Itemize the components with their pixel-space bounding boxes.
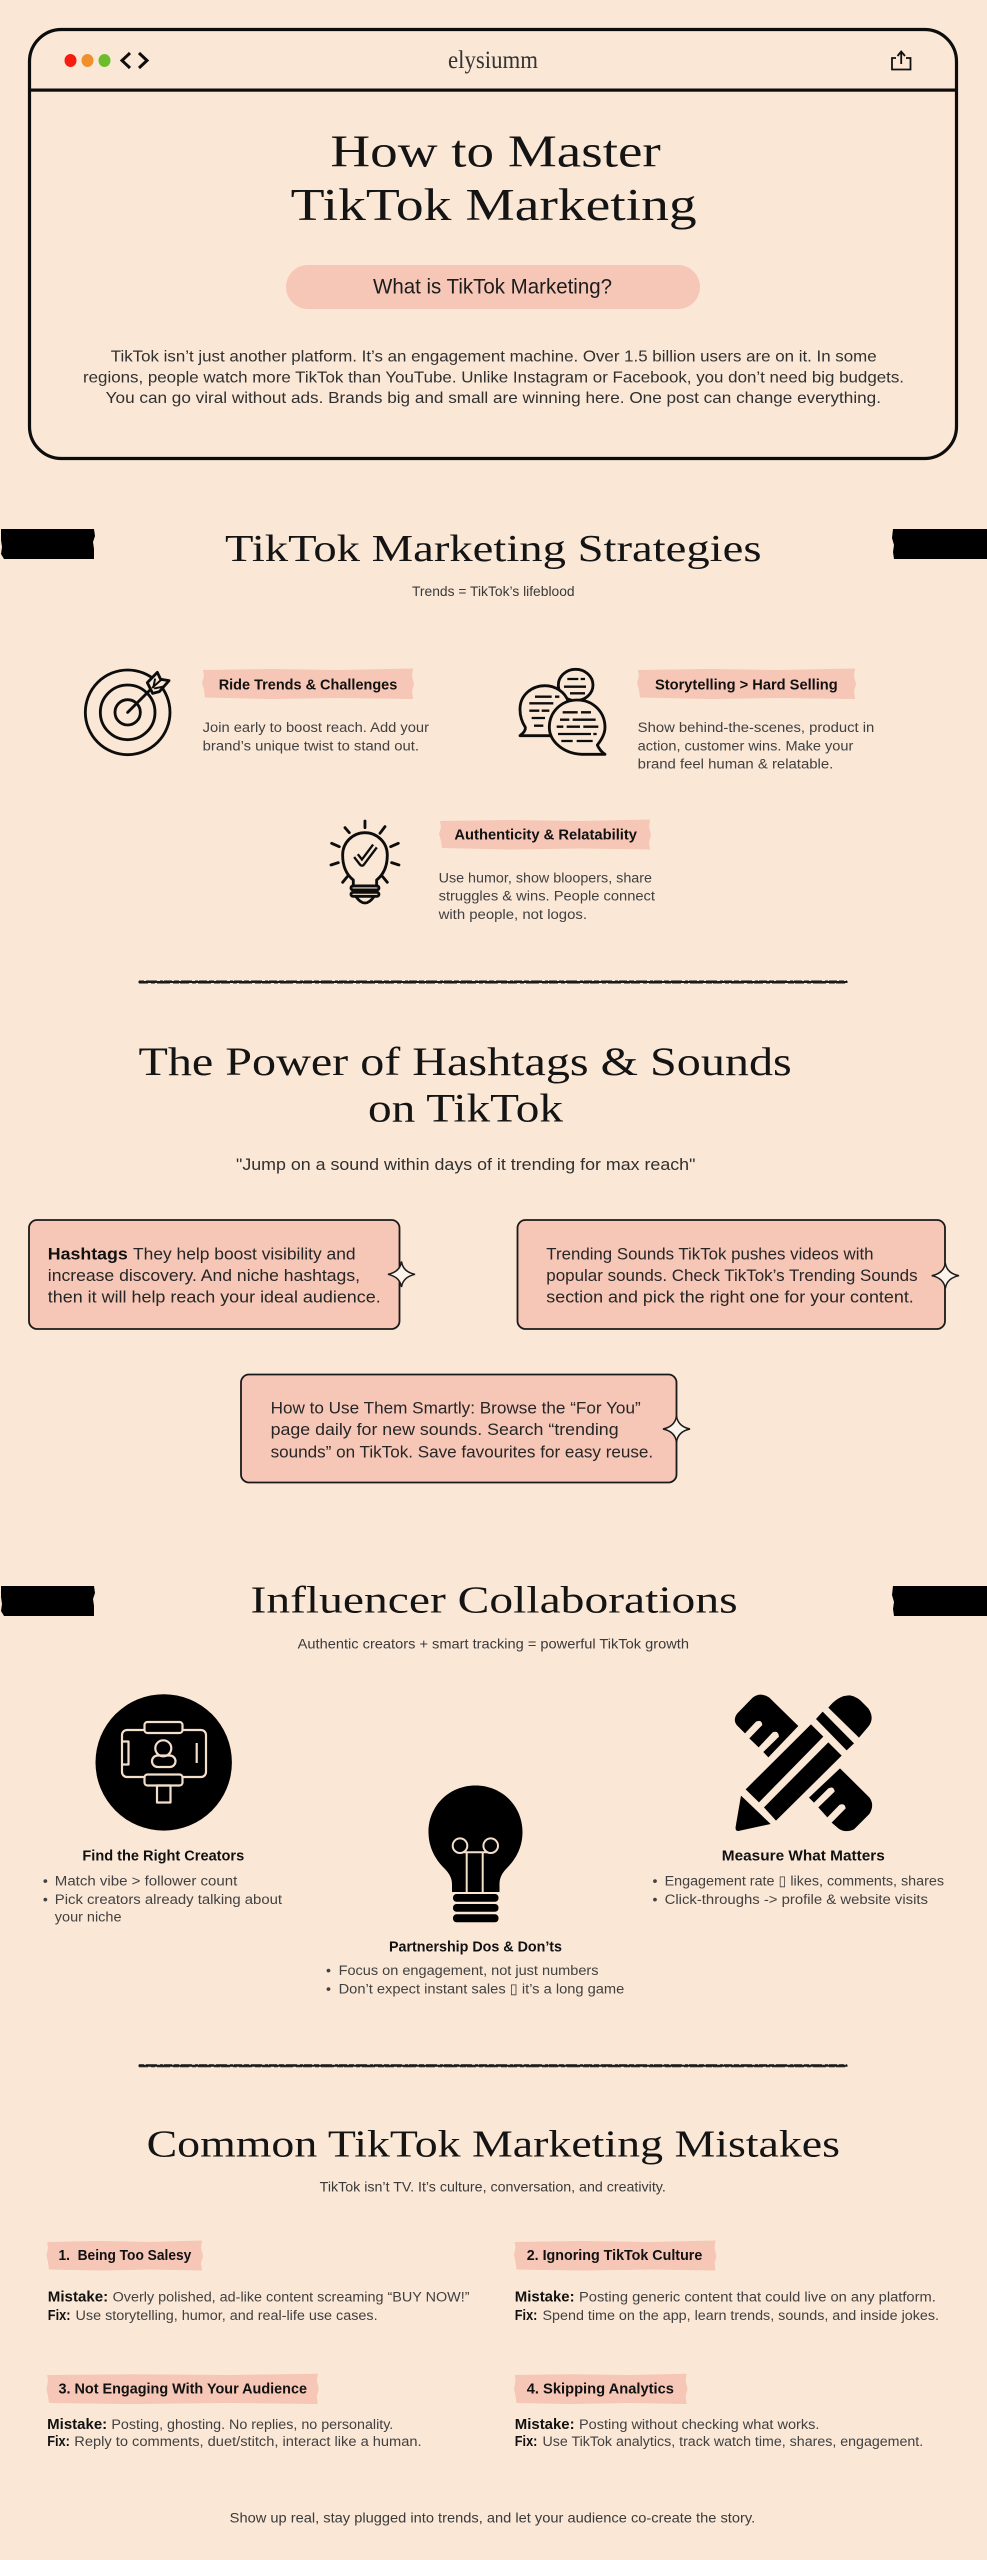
tag: Authenticity & Relatability: Authenticity & Relatability [454, 826, 638, 843]
heading: The Power of Hashtags & Sounds on TikTok: on TikTok [368, 1086, 563, 1131]
text: mistake 3 body: Mistake: [47, 2417, 107, 2433]
card: trending sounds: Trending Sounds TikTok pushes videos with [546, 1244, 874, 1263]
text: mistake 3 body: Reply to comments, duet/stitch, interact like a human. [74, 2434, 422, 2450]
text: authenticity body: struggles & wins. People connect [439, 889, 655, 905]
card: how to use them smartly: sounds” on TikTok. Save favourites for easy reuse. [271, 1442, 653, 1461]
icon: sparkle [388, 1262, 415, 1287]
icon: light bulb with check [331, 821, 399, 903]
subheading: influencer: Authentic creators + smart tracking = powerful TikTok growth [298, 1636, 689, 1651]
mistake 4 [514, 2374, 923, 2450]
text: ride trends body [203, 720, 429, 754]
bullet list: partnership: • [326, 1981, 331, 1997]
tag: Storytelling > Hard Selling [637, 668, 856, 699]
bullet list: measure: Engagement rate ▯ likes, comments, shares [665, 1874, 944, 1890]
decorative tape: right, strategies [892, 529, 987, 559]
column: measure what matters [653, 1695, 944, 1908]
title [291, 127, 697, 230]
tag: Ride Trends & Challenges: Ride Trends & Challenges [219, 676, 397, 693]
tag: Ride Trends & Challenges [202, 668, 414, 699]
tag: Ignoring TikTok Culture: 2. Ignoring TikTok Culture [527, 2247, 702, 2264]
text: mistake 1 body [48, 2290, 470, 2324]
text: storytelling body: action, customer wins. Make your [638, 738, 854, 754]
label: Measure What Matters: Measure What Matters [722, 1849, 885, 1865]
bullet list: measure: • [653, 1892, 658, 1908]
card: how to use them smartly: How to Use Them Smartly: Browse the “For You” [271, 1398, 641, 1417]
column: find the right creators [43, 1694, 282, 1926]
text: mistake 3 body [47, 2417, 422, 2450]
mistake 1 [46, 2240, 470, 2324]
text: authenticity body: with people, not logos. [438, 907, 587, 923]
subheading: trends: Trends = TikTok’s lifeblood [412, 584, 575, 599]
heading: Common TikTok Marketing Mistakes: Common TikTok Marketing Mistakes [147, 2124, 840, 2166]
icon: solid light bulb [428, 1786, 522, 1922]
icon: sparkle [663, 1416, 690, 1442]
title: How to Master [330, 127, 661, 177]
bullet list: measure [653, 1874, 944, 1908]
bullet list: partnership: Don’t expect instant sales ▯ it’s a long game [339, 1981, 624, 1997]
tag: Being Too Salesy: 1. Being Too Salesy [58, 2247, 192, 2264]
text: mistake 1 body: Mistake: [48, 2290, 108, 2306]
text: mistake 2 body: Mistake: [515, 2290, 575, 2306]
tag: Ignoring TikTok Culture [514, 2240, 716, 2270]
intro paragraph: You can go viral without ads. Brands big and small are winning here. One post can change everything. [106, 390, 881, 407]
card: hashtags [29, 1220, 415, 1329]
icon: speech bubbles [520, 669, 605, 754]
bullet list: creators: Match vibe > follower count [55, 1874, 237, 1890]
panel: browser window header [28, 30, 958, 458]
heading: The Power of Hashtags & Sounds on TikTok: The Power of Hashtags & Sounds [138, 1039, 792, 1084]
strategy: ride trends [85, 668, 429, 755]
card: hashtags: increase discovery. And niche hashtags, [48, 1266, 360, 1285]
tag: Being Too Salesy [46, 2240, 203, 2270]
tag: Authenticity & Relatability [439, 820, 651, 850]
text: storytelling body: brand feel human & relatable. [638, 756, 833, 772]
bullet list: measure: • [653, 1874, 658, 1890]
bullet list: creators: Pick creators already talking about [55, 1892, 282, 1908]
text: ride trends body: Join early to boost reach. Add your [203, 720, 429, 736]
bullet list: measure: Click-throughs -> profile & website visits [665, 1892, 928, 1908]
decorative tape: right, influencer [892, 1586, 987, 1616]
bullet list: partnership: Focus on engagement, not just numbers [339, 1963, 598, 1979]
text: mistake 4 body [515, 2417, 923, 2450]
icon: sparkle [932, 1263, 959, 1288]
mistake 3 [46, 2374, 422, 2450]
text: mistake 1 body: Fix: [48, 2308, 70, 2324]
pill heading: What is TikTok Marketing? [286, 265, 700, 309]
card: how to use them smartly: page daily for new sounds. Search “trending [271, 1420, 619, 1439]
heading: The Power of Hashtags & Sounds on TikTok [138, 1039, 792, 1131]
card: hashtags: They help boost visibility and [133, 1244, 356, 1263]
text: mistake 4 body: Mistake: [515, 2417, 575, 2433]
icon: crossed pencil and ruler [735, 1695, 872, 1831]
text: mistake 2 body: Spend time on the app, learn trends, sounds, and inside jokes. [542, 2308, 939, 2324]
card: trending sounds: popular sounds. Check TikTok’s Trending Sounds [546, 1266, 918, 1285]
icon: share [892, 52, 910, 70]
tag: Skipping Analytics: 4. Skipping Analytics [527, 2380, 674, 2397]
mistake 2 [514, 2240, 939, 2324]
intro paragraph: TikTok isn’t just another platform. It’s an engagement machine. Over 1.5 billion users are on it. In some [111, 349, 877, 366]
bullet list: creators: • [43, 1874, 48, 1890]
text: storytelling body [638, 720, 874, 772]
text: authenticity body [438, 870, 655, 923]
bullet list: partnership: • [326, 1963, 331, 1979]
icon: target with arrow [85, 670, 170, 755]
card: hashtags: then it will help reach your ideal audience. [48, 1288, 381, 1307]
bullet list: creators: • [43, 1892, 48, 1908]
text: mistake 2 body: Fix: [515, 2308, 537, 2324]
intro paragraph [83, 349, 904, 407]
text: ride trends body: brand’s unique twist to stand out. [203, 738, 419, 754]
closing line: Show up real, stay plugged into trends, and let your audience co-create the story. [230, 2510, 755, 2525]
text: mistake 1 body: Overly polished, ad-like content screaming “BUY NOW!” [113, 2290, 470, 2306]
logo: elysiumm: elysiumm [448, 47, 539, 74]
card: trending sounds: section and pick the right one for your content. [546, 1288, 914, 1307]
text: mistake 3 body: Posting, ghosting. No replies, no personality. [111, 2417, 393, 2433]
title: TikTok Marketing [291, 180, 697, 230]
card: how to use them smartly [241, 1374, 690, 1482]
text: mistake 2 body: Posting generic content that could live on any platform. [579, 2290, 936, 2306]
strategy: storytelling [520, 668, 874, 772]
card: hashtags: Hashtags [48, 1244, 128, 1263]
icon: window dots and code chevrons [64, 53, 147, 68]
bullet list: creators: your niche [55, 1910, 122, 1926]
subheading: quote: "Jump on a sound within days of it trending for max reach" [236, 1156, 696, 1174]
text: mistake 4 body: Posting without checking what works. [579, 2417, 819, 2433]
tag: Storytelling > Hard Selling: Storytelling > Hard Selling [655, 676, 838, 693]
decorative tape: left, strategies [1, 529, 95, 559]
pill heading: What is TikTok Marketing?: What is TikTok Marketing? [373, 276, 612, 298]
text: mistake 4 body: Fix: [515, 2434, 537, 2450]
column: partnership dos and don'ts [326, 1786, 624, 1997]
bullet list: creators [43, 1874, 282, 1926]
heading: Influencer Collaborations: Influencer Collaborations [250, 1580, 738, 1622]
label: Find the Right Creators: Find the Right Creators [82, 1849, 244, 1865]
strategy: authenticity [331, 820, 655, 923]
label: Partnership Dos & Don'ts: Partnership Dos & Don’ts [389, 1940, 562, 1956]
card: trending sounds [518, 1220, 959, 1329]
text: authenticity body: Use humor, show bloopers, share [439, 870, 652, 886]
heading: TikTok Marketing Strategies: TikTok Marketing Strategies [225, 528, 762, 570]
text: mistake 2 body [515, 2290, 939, 2324]
intro paragraph: regions, people watch more TikTok than YouTube. Unlike Instagram or Facebook, you don’t need big budgets. [83, 369, 904, 386]
decorative tape: left, influencer [1, 1586, 95, 1616]
subheading: mistakes: TikTok isn’t TV. It’s culture, conversation, and creativity. [320, 2180, 666, 2195]
bullet list: partnership [326, 1963, 624, 1997]
tag: Skipping Analytics [514, 2374, 688, 2404]
tag: Not Engaging With Your Audience [46, 2374, 319, 2404]
icon: selfie stick in circle [96, 1694, 232, 1831]
text: storytelling body: Show behind-the-scenes, product in [638, 720, 874, 736]
text: mistake 3 body: Fix: [47, 2434, 70, 2450]
text: mistake 1 body: Use storytelling, humor, and real-life use cases. [76, 2308, 378, 2324]
text: mistake 4 body: Use TikTok analytics, track watch time, shares, engagement. [542, 2434, 923, 2450]
tag: Not Engaging With Your Audience: 3. Not Engaging With Your Audience [58, 2380, 307, 2397]
